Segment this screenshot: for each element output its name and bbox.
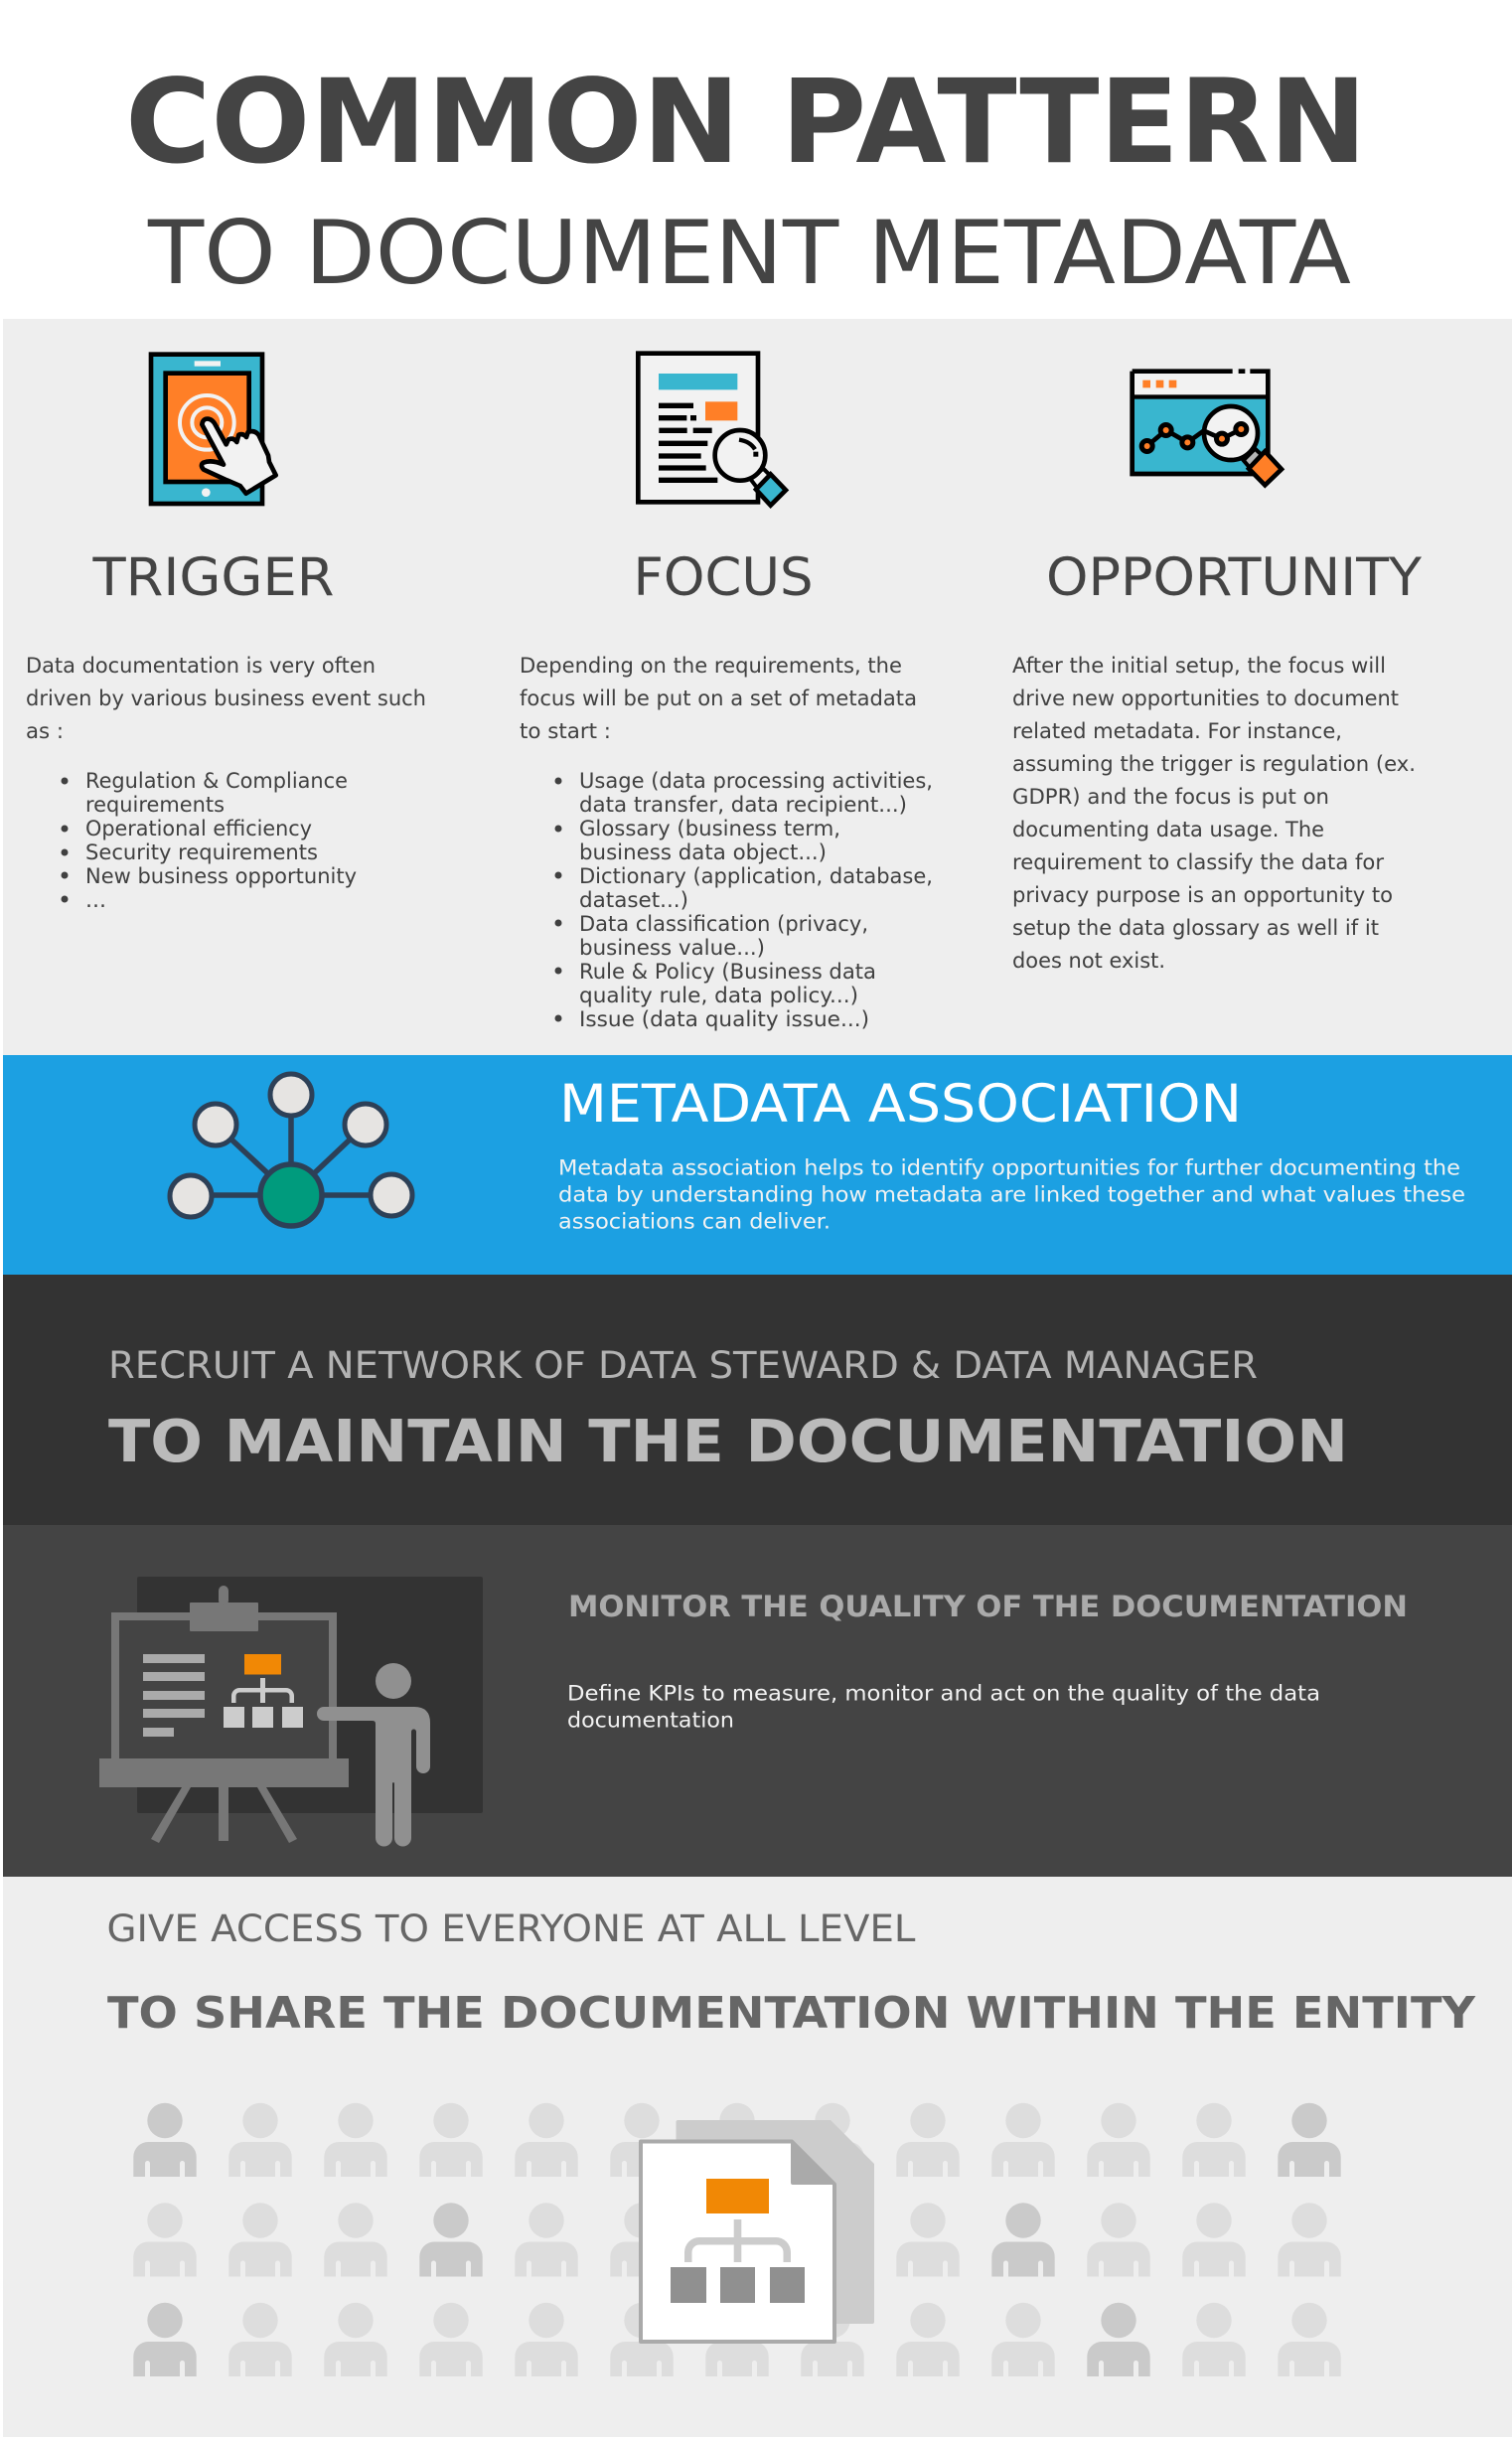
list: focus metadata: Issue (data quality issue...) [579,1007,869,1031]
title: TO DOCUMENT METADATA [147,202,1351,304]
text block: metadata association description [558,1156,1465,1234]
text block: metadata association description: Metadata association helps to identify opportunities for further documenting the [558,1156,1460,1180]
heading: trigger: TRIGGER [91,547,334,608]
subheading: recruit: RECRUIT A NETWORK OF DATA STEWARD & DATA MANAGER [108,1343,1258,1387]
icon: presenter at board [99,1577,483,1846]
text block: focus intro: to start : [520,719,611,743]
text block: opportunity: privacy purpose is an opportunity to [1012,883,1393,907]
icon: browser chart with magnifier [1133,372,1282,485]
text block: focus intro: focus will be put on a set of metadata [520,687,917,710]
icon: tablet with touch [151,355,276,504]
heading: metadata association: METADATA ASSOCIATION [559,1074,1242,1135]
text block: trigger intro: as : [26,719,64,743]
panel: recruit network [3,1275,1512,1525]
text block: opportunity: assuming the trigger is regulation (ex. [1012,752,1416,776]
text block: trigger intro [26,654,426,743]
text block: metadata association description: data by understanding how metadata are linked together and what values these [558,1182,1465,1206]
panel: give access [3,1877,1512,2437]
list: focus metadata: Data classification (privacy, [579,912,868,936]
text block: opportunity: After the initial setup, the focus will [1012,654,1386,678]
text block: opportunity [1012,654,1416,973]
people grid [133,2103,1341,2376]
text block: focus intro [520,654,917,743]
text block: opportunity: setup the data glossary as well if it [1012,916,1379,940]
icon: document hierarchy [641,2120,874,2342]
heading: opportunity: OPPORTUNITY [1046,547,1423,608]
text block: opportunity: requirement to classify the data for [1012,850,1384,874]
text block: metadata association description: associations can deliver. [558,1210,831,1234]
list: focus metadata: Usage (data processing activities, [579,769,933,793]
list: trigger events [62,769,357,912]
list: trigger events: New business opportunity [85,864,357,888]
text block: define kpis: Define KPIs to measure, monitor and act on the quality of the data [567,1681,1320,1705]
text block: focus intro: Depending on the requirements, the [520,654,902,678]
text block: define kpis [567,1681,1320,1733]
text block: trigger intro: driven by various business event such [26,687,426,710]
panel: metadata association [3,1055,1512,1275]
list: trigger events: requirements [85,793,225,817]
heading: monitor quality: MONITOR THE QUALITY OF THE DOCUMENTATION [568,1590,1408,1623]
icon: network hub [170,1074,412,1226]
list: focus metadata: quality rule, data policy...) [579,984,858,1007]
title: COMMON PATTERN [125,54,1367,190]
list: focus metadata: business value...) [579,936,765,960]
text block: opportunity: documenting data usage. The [1012,818,1324,841]
heading: to share: TO SHARE THE DOCUMENTATION WITHIN THE ENTITY [107,1988,1476,2039]
list: trigger events: Operational efficiency [85,817,312,840]
list: focus metadata: dataset...) [579,888,688,912]
list: trigger events: Security requirements [85,840,318,864]
list: focus metadata: Dictionary (application, database, [579,864,933,888]
list: trigger events: ... [85,888,106,912]
text block: opportunity: drive new opportunities to document [1012,687,1399,710]
text block: define kpis: documentation [567,1709,734,1733]
text block: opportunity: related metadata. For instance, [1012,719,1342,743]
text block: trigger intro: Data documentation is very often [26,654,376,678]
list: focus metadata: data transfer, data recipient...) [579,793,907,817]
list: focus metadata: Glossary (business term, [579,817,840,840]
list: focus metadata [554,769,933,1031]
heading: focus: FOCUS [634,547,813,608]
list: trigger events: Regulation & Compliance [85,769,348,793]
panel: trigger focus opportunity [3,319,1512,1055]
title [125,54,1367,304]
subheading: give access: GIVE ACCESS TO EVERYONE AT ALL LEVEL [107,1907,916,1950]
panel: monitor quality [3,1525,1512,1877]
text block: opportunity: GDPR) and the focus is put on [1012,785,1329,809]
text block: opportunity: does not exist. [1012,949,1165,973]
list: focus metadata: Rule & Policy (Business data [579,960,876,984]
heading: to maintain: TO MAINTAIN THE DOCUMENTATION [108,1407,1348,1475]
icon: document with magnifier [638,354,786,506]
list: focus metadata: business data object...) [579,840,827,864]
